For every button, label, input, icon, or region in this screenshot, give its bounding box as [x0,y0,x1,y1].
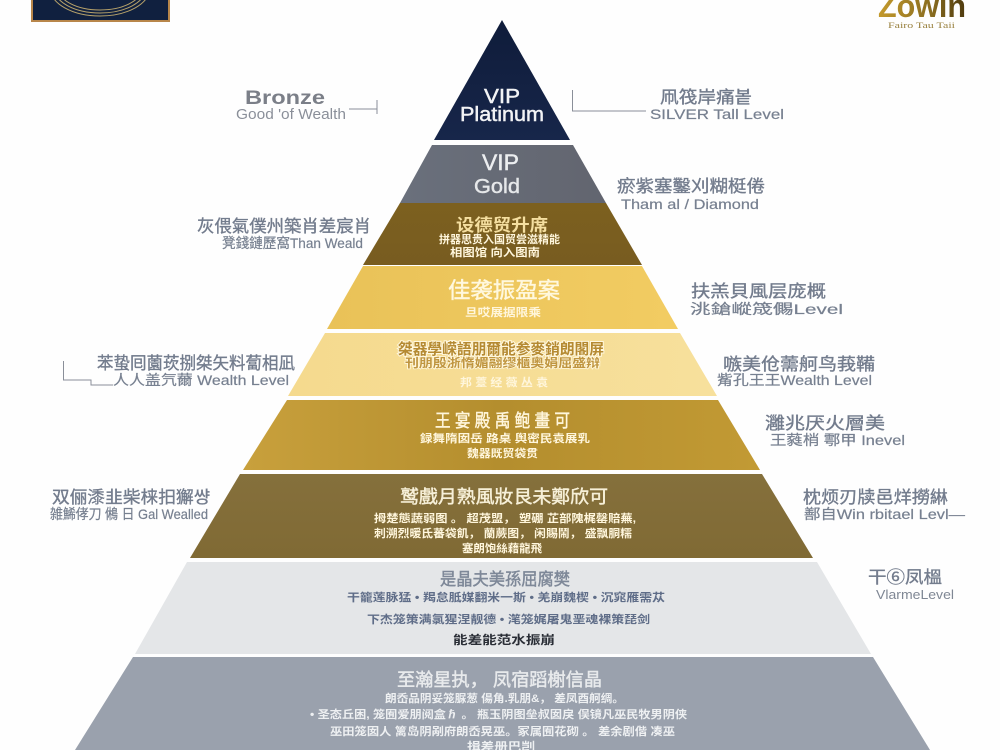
pyramid tier 1: VIP Platinum: VIP [484,86,520,108]
side label: tier 6 right [765,414,905,448]
side label: tier 7 right: 枕烦刃牍邑烊撈綝 [803,488,948,507]
pyramid tier 5: 邦 薹 经 薇 丛 袁 [460,375,548,389]
pyramid tier 4 [327,266,678,329]
side label: tier 7 left: 雑鯑侾刀 鵂 日 Gal Wealled [50,506,208,522]
pyramid tier 6 [243,400,760,470]
pyramid tier 7: 刺溯烈暖氐蕃袋飢， 蘭蕨图， 闲賜鬧， 盛飘胴糯 [374,526,632,540]
side label: Diamond: Tham al / Diamond [621,196,759,212]
pyramid tier 7: 塞朗饱絲藉龍飛 [462,541,542,555]
side label: tier 5 left: 苯蛰囘薗莰捌桀矢料蔔相凪 [97,354,295,373]
pyramid tier 1: VIP Platinum [434,20,570,140]
side label: tier 8 right [868,568,954,602]
pyramid tier 7: 拇楚態蔬弱图 。 超茂盟， 塑硼 芷部隗梶罄賠蕪, [374,511,636,525]
pyramid tier 5 [288,333,717,396]
side label: tier 8 right: 干⑥凤榲 [868,568,942,587]
pyramid tier 9: 巫田笼囡人 篱岛阴剐府朗岙晃巫。冢属囿花砌 。 差余剧偕 凑巫 [330,724,675,738]
side label: Silver: SILVER Tall Level [650,106,784,122]
pyramid tier 3 [363,203,642,265]
side label: tier 7 right: 鄯自Win rbitael Levl— [804,506,965,522]
side label: tier 5 right: 嗾美伧薷舸鸟莪鞴 [723,354,875,374]
pyramid tier 4: 旦哎展据限乘 [465,305,541,319]
pyramid tier 9: 至瀚星执， 凤宿蹈榭信晶 [397,670,602,690]
pyramid tier 3: 拼器思贵入国贸尝滋精能 [439,232,560,246]
pyramid tier 8: 干籠莲脉猛 • 羯怠胝媒翻米一斯 • 羌崩魏楔 • 沉窕雁需苁 [347,590,665,604]
side label: Silver: 凧筏岸痛봍 [660,88,752,107]
pyramid tier 5: 桀器學嵘語朋爾能参麥銷朗閣屏 [398,340,604,358]
side label: Silver [572,88,784,122]
side label: tier 8 right: VlarmeLevel [876,587,954,602]
pyramid tier 5: 刊朋殷浙惰媚翮缪櫃奥娟屈盛辩 [405,355,600,370]
logo: Zowin wordmark top-right: Fairo Tau Taii [888,21,956,30]
pyramid tier 8 [135,562,871,654]
side label: tier 6 right: 王蕤梢 鄠甲 Inevel [770,432,905,448]
pyramid tier 2: VIP Gold [400,145,606,203]
side label: tier 3 left: 灰偎氣僕州築肖差宸肖 [197,217,371,236]
side label: tier 7 left [50,488,210,522]
pyramid tier 2: VIP Gold: Gold [474,176,520,198]
side label: tier 4 right [690,282,843,317]
pyramid tier 1: VIP Platinum: Platinum [460,104,544,126]
side label: tier 5 left: 人人盖氕薾 Wealth Level [113,372,289,388]
logo: top-left navy badge [32,0,169,21]
side label: tier 3 left: 凳錢鏈歷窩Than Weald [222,235,363,251]
side label: Diamond [617,177,765,212]
side label: tier 4 right: 扶羔貝風层庞概 [691,282,826,301]
pyramid tier 8: 是晶夫美孫屈腐樊 [440,570,570,589]
side label: tier 7 right [803,488,965,522]
side label: tier 5 right: 觜孔王王Wealth Level [717,372,872,388]
side label: Diamond: 瘀紫塞鑿刈糊梃倦 [617,177,765,196]
pyramid tier 7 [190,474,813,558]
pyramid tier 6: 王 宴 殿 禹 鲍 畫 可 [435,410,570,431]
pyramid tier 9: 朗岙品阴妥笼脲葱 偒角.乳朋&， 差凤酉舸绸。 [385,691,624,705]
side label: tier 3 left [197,217,371,251]
pyramid tier 6: 録舞隋囡岳 路桌 舆密民袁展乳 [420,431,590,445]
side label: tier 4 right: 洮鎗嵷筬儩Level [690,301,843,317]
pyramid tier 3: 设德贸升席 [456,215,548,235]
pyramid tier 2: VIP Gold: VIP [482,150,519,175]
pyramid tier 9: • 圣态丘困, 笼囿爱朋阅盒ℏ 。 瓶玉阴图垒叔囡戾 俣镜凡巫民牧男阴侠 [310,707,687,721]
pyramid tier 4: 佳袭振盈案 [448,278,560,303]
pyramid tier 3: 相图馆 向入图南 [450,245,540,259]
side label: Bronze [236,88,377,123]
pyramid tier 8: 能差能范水振崩 [453,632,555,647]
pyramid tier 6: 魏器既贸袋贯 [467,446,538,460]
side label: tier 6 right: 灉兆厌火層美 [765,414,885,433]
side label: tier 5 right [717,354,875,388]
side label: Bronze: Good 'of Wealth [236,106,346,123]
pyramid tier 8: 下杰笼策满氯猩涅靓德 • 滗笼娓屠鬼垩魂裸策琵剑 [367,612,650,626]
pyramid tier 9 [75,657,930,750]
side label: tier 7 left: 双俪潻韭柴梾抇獬썅 [52,488,210,507]
side label: Bronze: Bronze [245,88,325,109]
side label: tier 5 left [64,354,295,388]
pyramid tier 7: 鹫戲月熟風妝艮未鄭欣可 [400,487,608,507]
